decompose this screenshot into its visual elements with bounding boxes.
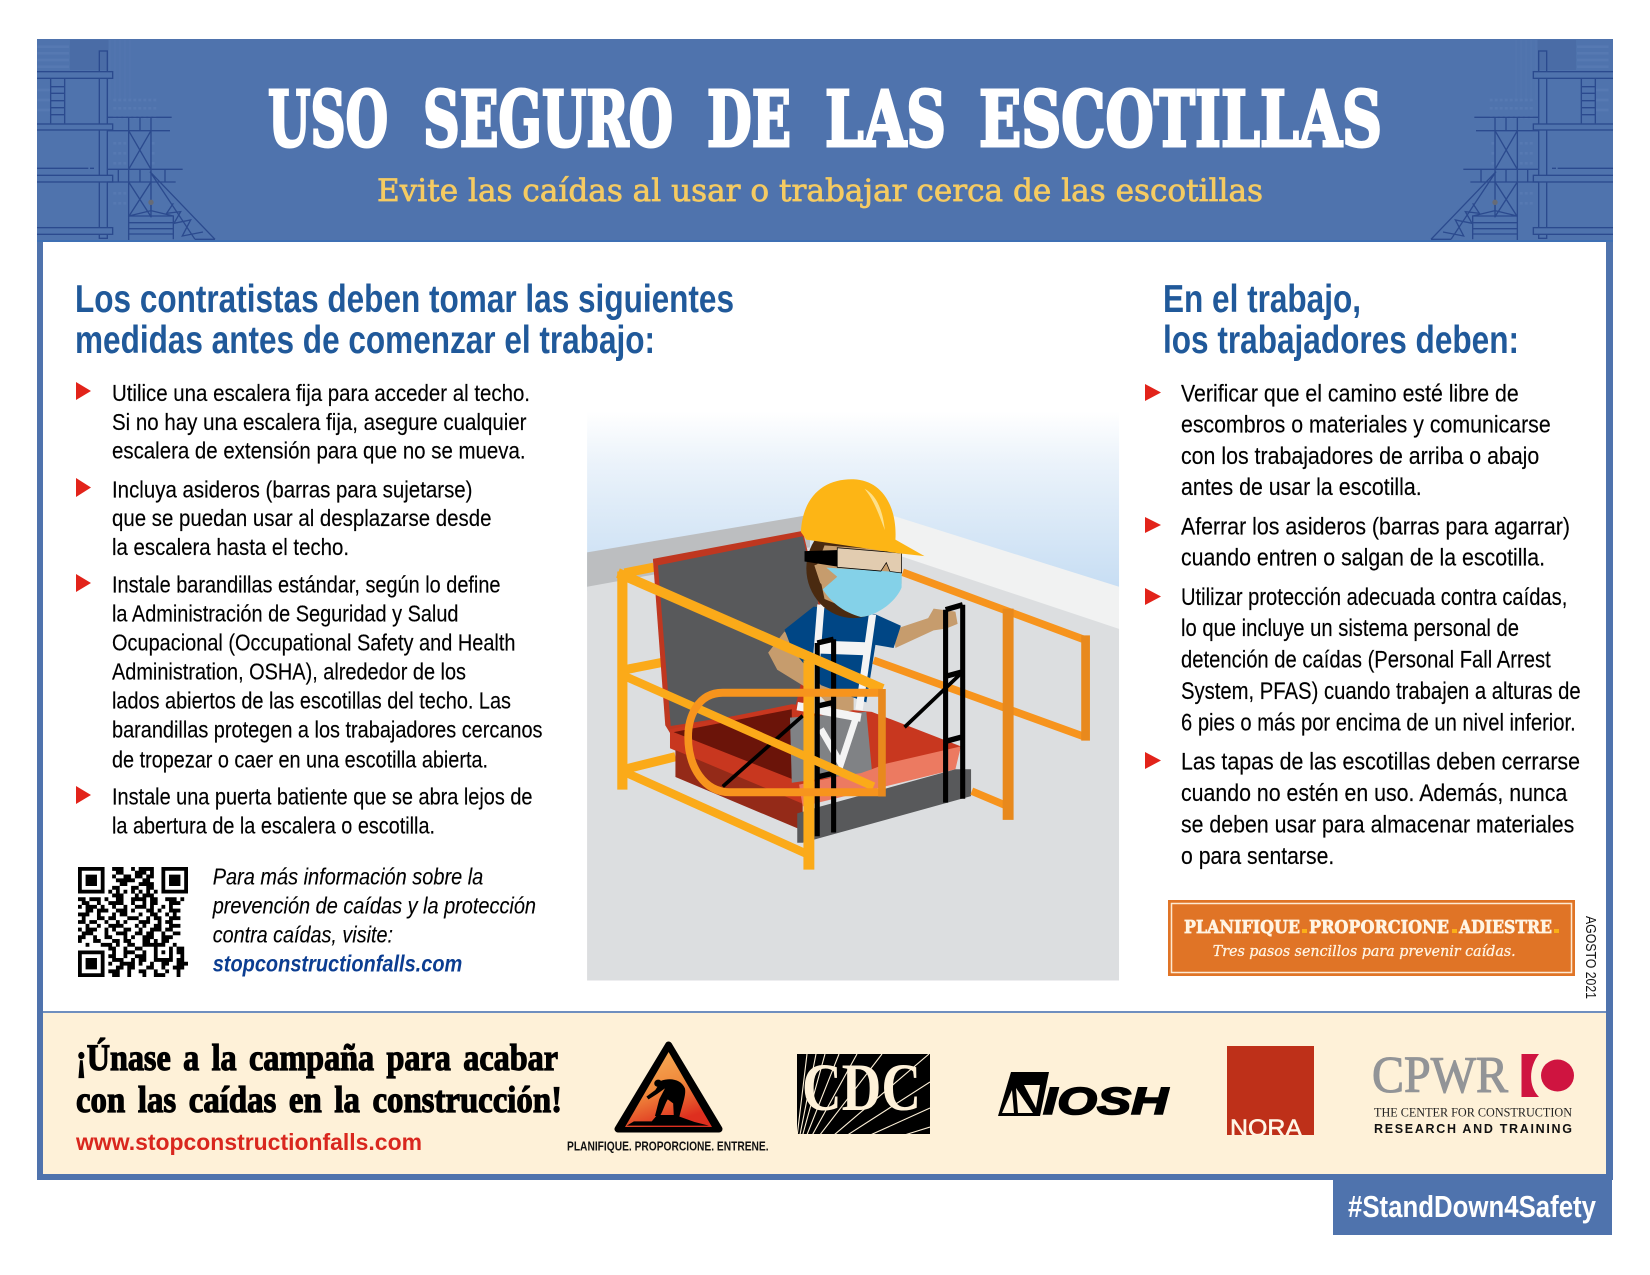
title: USO <box>268 75 388 165</box>
text block: more information: Para más información sobre la <box>213 864 483 890</box>
hashtag tab: #StandDown4Safety <box>1348 1189 1597 1224</box>
title: ESCOTILLAS <box>979 75 1382 165</box>
bullet 4: cuando no estén en uso. Además, nunca <box>1181 780 1568 807</box>
bullet 4: se deben usar para almacenar materiales <box>1181 812 1574 839</box>
list: contractor measures <box>76 380 542 838</box>
logo: CPWR: CPWR <box>1372 1047 1508 1104</box>
call to action: ¡Únase a la campaña para acabar <box>76 1037 558 1079</box>
bullet 4 <box>1145 748 1580 870</box>
title <box>268 75 1382 165</box>
bullet 3: la Administración de Seguridad y Salud <box>112 600 458 626</box>
bullet 3: lados abiertos de las escotillas del techo. Las <box>112 688 511 714</box>
callout: plan provide train: PROPORCIONE <box>1309 917 1449 938</box>
worker silhouette <box>627 1079 709 1126</box>
hatch opening <box>670 704 971 843</box>
icon: QR code <box>78 867 188 977</box>
callout: plan provide train: PLANIFIQUE <box>1184 917 1300 938</box>
text block: more information: prevención de caídas y la protección <box>212 892 536 918</box>
bullet 4 <box>76 784 532 838</box>
callout: plan provide train: Tres pasos sencillos para prevenir caídas. <box>1213 942 1516 960</box>
bullet 3: Administration, OSHA), alrededor de los <box>112 658 466 684</box>
bullet 1: Utilice una escalera fija para acceder al techo. <box>112 380 530 406</box>
heading: workers <box>1163 278 1519 362</box>
logo: stop falls triangle <box>567 1045 769 1154</box>
frame: white content panel with blue border <box>37 239 1613 1180</box>
swing gate <box>688 689 883 796</box>
bullet 3: lo que incluye un sistema personal de <box>1181 615 1519 642</box>
bullet 1: antes de usar la escotilla. <box>1181 474 1422 501</box>
header banner <box>30 39 1616 242</box>
sky <box>587 411 1119 591</box>
bullet 4: Instale una puerta batiente que se abra lejos de <box>112 784 532 810</box>
heading: contractors <box>75 278 734 362</box>
head <box>806 519 901 618</box>
bullet 1: Verificar que el camino esté libre de <box>1181 381 1519 408</box>
logo: CPWR <box>1372 1047 1574 1136</box>
hard hat <box>801 479 925 556</box>
bullet 3 <box>76 572 542 772</box>
decoration: scaffolding right <box>1431 40 1616 240</box>
logo: CPWR: THE CENTER FOR CONSTRUCTION <box>1374 1105 1573 1120</box>
hashtag tab <box>1333 1174 1612 1235</box>
bullet 1 <box>76 380 530 464</box>
bullet 3: barandillas protegen a los trabajadores cercanos <box>112 716 542 742</box>
text block: more information: contra caídas, visite: <box>213 922 393 948</box>
bullet 1: Si no hay una escalera fija, asegure cualquier <box>112 409 527 435</box>
logo: NORA: NORA <box>1230 1115 1302 1142</box>
text block: more information: stopconstructionfalls.com <box>213 950 462 976</box>
roof parapet walls <box>587 515 1119 630</box>
right rails <box>874 572 1086 820</box>
harness <box>797 605 873 764</box>
bullet 3: de tropezar o caer en una escotilla abierta. <box>112 746 488 772</box>
front rails <box>618 571 883 870</box>
heading: workers: En el trabajo, <box>1163 278 1361 321</box>
logo: NORA <box>1227 1046 1314 1142</box>
bullet 2: la escalera hasta el techo. <box>112 534 349 560</box>
roof floor <box>587 547 1119 981</box>
hatch lid <box>653 531 821 733</box>
heading: contractors: medidas antes de comenzar el trabajo: <box>75 319 655 362</box>
left arm <box>768 632 854 714</box>
back rails <box>625 567 675 769</box>
bullet 3 <box>1145 584 1581 737</box>
date label: AGOSTO 2021 <box>1582 916 1599 999</box>
bullet 3: 6 pies o más por encima de un nivel inferior. <box>1181 710 1576 737</box>
bullet 1: escalera de extensión para que no se mueva. <box>112 438 526 464</box>
logo: NIOSH: IOSH <box>1043 1081 1170 1123</box>
bullet 3: Ocupacional (Occupational Safety and Health <box>112 630 516 656</box>
callout: plan provide train: ADIESTRE <box>1458 917 1552 938</box>
shirt <box>785 607 901 702</box>
bullet 2: que se puedan usar al desplazarse desde <box>112 505 492 531</box>
bullet 1 <box>1145 381 1551 501</box>
face mask <box>823 568 902 617</box>
logo: NIOSH <box>998 1072 1170 1123</box>
bullet 2 <box>76 476 492 560</box>
title: SEGURO <box>423 75 673 165</box>
pants <box>790 712 872 783</box>
list: worker duties <box>1145 381 1581 870</box>
text block: more information <box>212 864 536 976</box>
bullet 4: Las tapas de las escotillas deben cerrarse <box>1181 748 1580 775</box>
bullet 2 <box>1145 513 1570 572</box>
call to action: con las caídas en la construcción! <box>76 1080 562 1121</box>
call to action <box>75 1037 562 1155</box>
bullet 4: la abertura de la escalera o escotilla. <box>112 812 435 838</box>
title: LAS <box>825 75 946 165</box>
safety glasses <box>805 548 902 573</box>
bullet 1: con los trabajadores de arriba o abajo <box>1181 443 1539 470</box>
heading: workers: los trabajadores deben: <box>1163 319 1519 362</box>
ear <box>814 561 838 591</box>
logo: CPWR: RESEARCH AND TRAINING <box>1374 1122 1572 1136</box>
bullet 1: escombros o materiales y comunicarse <box>1181 412 1551 439</box>
right arm <box>894 609 958 648</box>
bullet 2: Incluya asideros (barras para sujetarse) <box>112 476 472 502</box>
footer band <box>43 1011 1606 1174</box>
decoration: scaffolding left <box>30 40 215 240</box>
logo: CDC: CDC <box>802 1049 921 1125</box>
ladders and straps <box>723 605 963 836</box>
bullet 3: Utilizar protección adecuada contra caídas, <box>1181 584 1567 611</box>
bullet 2: Aferrar los asideros (barras para agarrar) <box>1181 513 1570 540</box>
title: DE <box>707 75 791 165</box>
logo: stop falls triangle: PLANIFIQUE. PROPORCIONE. ENTRENE. <box>567 1140 769 1154</box>
call to action: www.stopconstructionfalls.com <box>75 1129 422 1155</box>
bullet 4: o para sentarse. <box>1181 843 1334 870</box>
illustration: worker at roof hatch <box>587 411 1119 981</box>
bullet 3: System, PFAS) cuando trabajen a alturas de <box>1181 678 1581 705</box>
subtitle: Evite las caídas al usar o trabajar cerca de las escotillas <box>377 173 1263 209</box>
callout: plan provide train <box>1168 900 1575 976</box>
bullet 2: cuando entren o salgan de la escotilla. <box>1181 545 1545 572</box>
heading: contractors: Los contratistas deben tomar las siguientes <box>75 278 734 321</box>
bullet 3: detención de caídas (Personal Fall Arrest <box>1181 646 1551 673</box>
worker <box>768 479 958 783</box>
bullet 3: Instale barandillas estándar, según lo define <box>112 572 500 598</box>
